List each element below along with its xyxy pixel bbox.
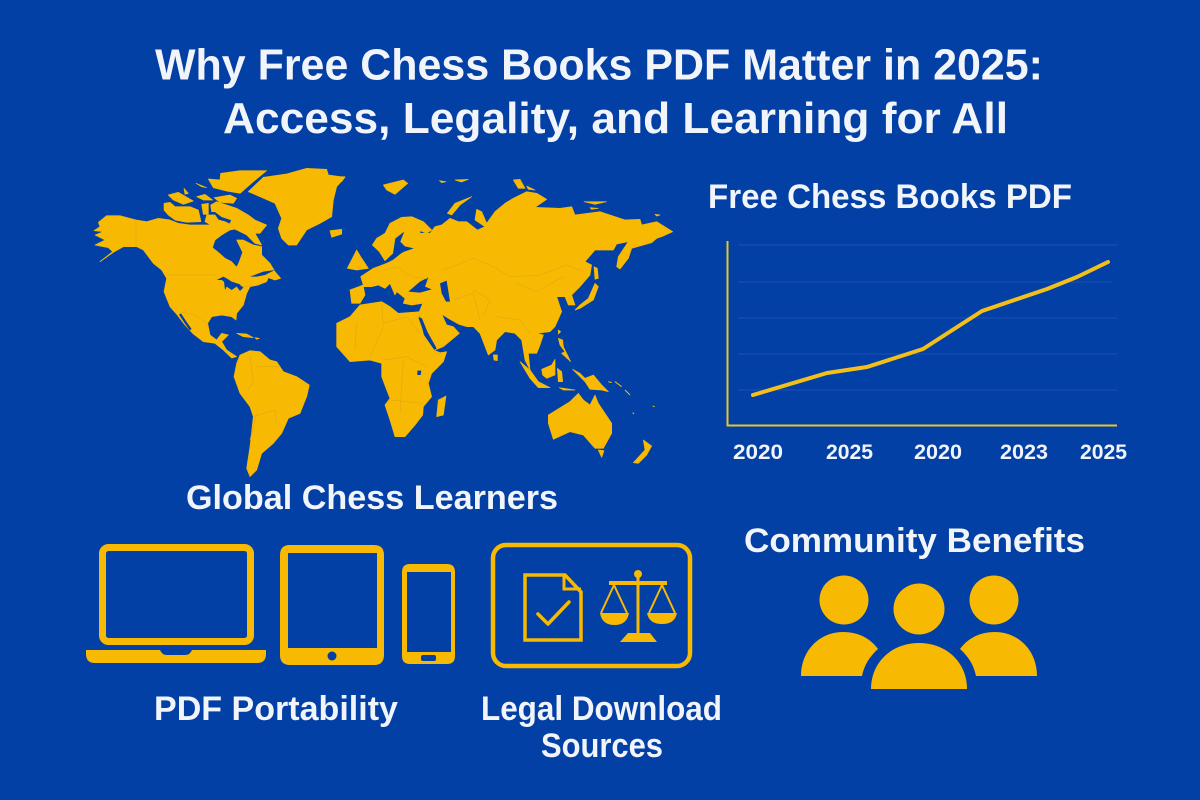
map: North America and the Arctic	[94, 168, 345, 358]
icon: phone	[402, 564, 455, 664]
map: Eurasia	[340, 177, 673, 370]
label: Legal Download Sources	[481, 690, 722, 765]
label: Legal Download Sources: Legal Download	[481, 690, 722, 728]
growth line	[753, 262, 1108, 395]
axis year labels	[733, 441, 1127, 464]
label: Legal Download Sources: Sources	[541, 727, 663, 765]
axis year labels: 2025	[826, 441, 873, 464]
map: Caribbean and South America	[234, 333, 309, 477]
axis year labels: 2020	[733, 441, 783, 464]
icon: document with check mark	[525, 575, 581, 640]
map: Africa	[337, 302, 447, 437]
label: PDF Portability: PDF Portability	[154, 690, 398, 728]
map: Southeast Asia and Oceania	[493, 330, 655, 463]
label: Global Chess Learners: Global Chess Learners	[186, 479, 558, 517]
axis year labels: 2025	[1080, 441, 1127, 464]
line chart	[728, 241, 1127, 464]
title: Why Free Chess Books PDF Matter in 2025:	[155, 40, 1043, 90]
panel: legal sources icon box	[493, 545, 690, 666]
axis year labels: 2020	[914, 441, 962, 464]
icon: scales of justice	[600, 570, 677, 642]
icon: laptop	[86, 548, 266, 663]
heading: Community Benefits: Community Benefits	[744, 522, 1085, 560]
world map	[94, 168, 673, 477]
title: Access, Legality, and Learning for All	[223, 94, 1008, 143]
axis year labels: 2023	[1000, 441, 1048, 464]
icon: tablet	[280, 545, 384, 665]
chart axes	[728, 241, 1117, 426]
icon: community group of three people	[801, 576, 1037, 689]
heading: Free Chess Books PDF: Free Chess Books PDF	[708, 178, 1072, 216]
title	[155, 40, 1043, 143]
